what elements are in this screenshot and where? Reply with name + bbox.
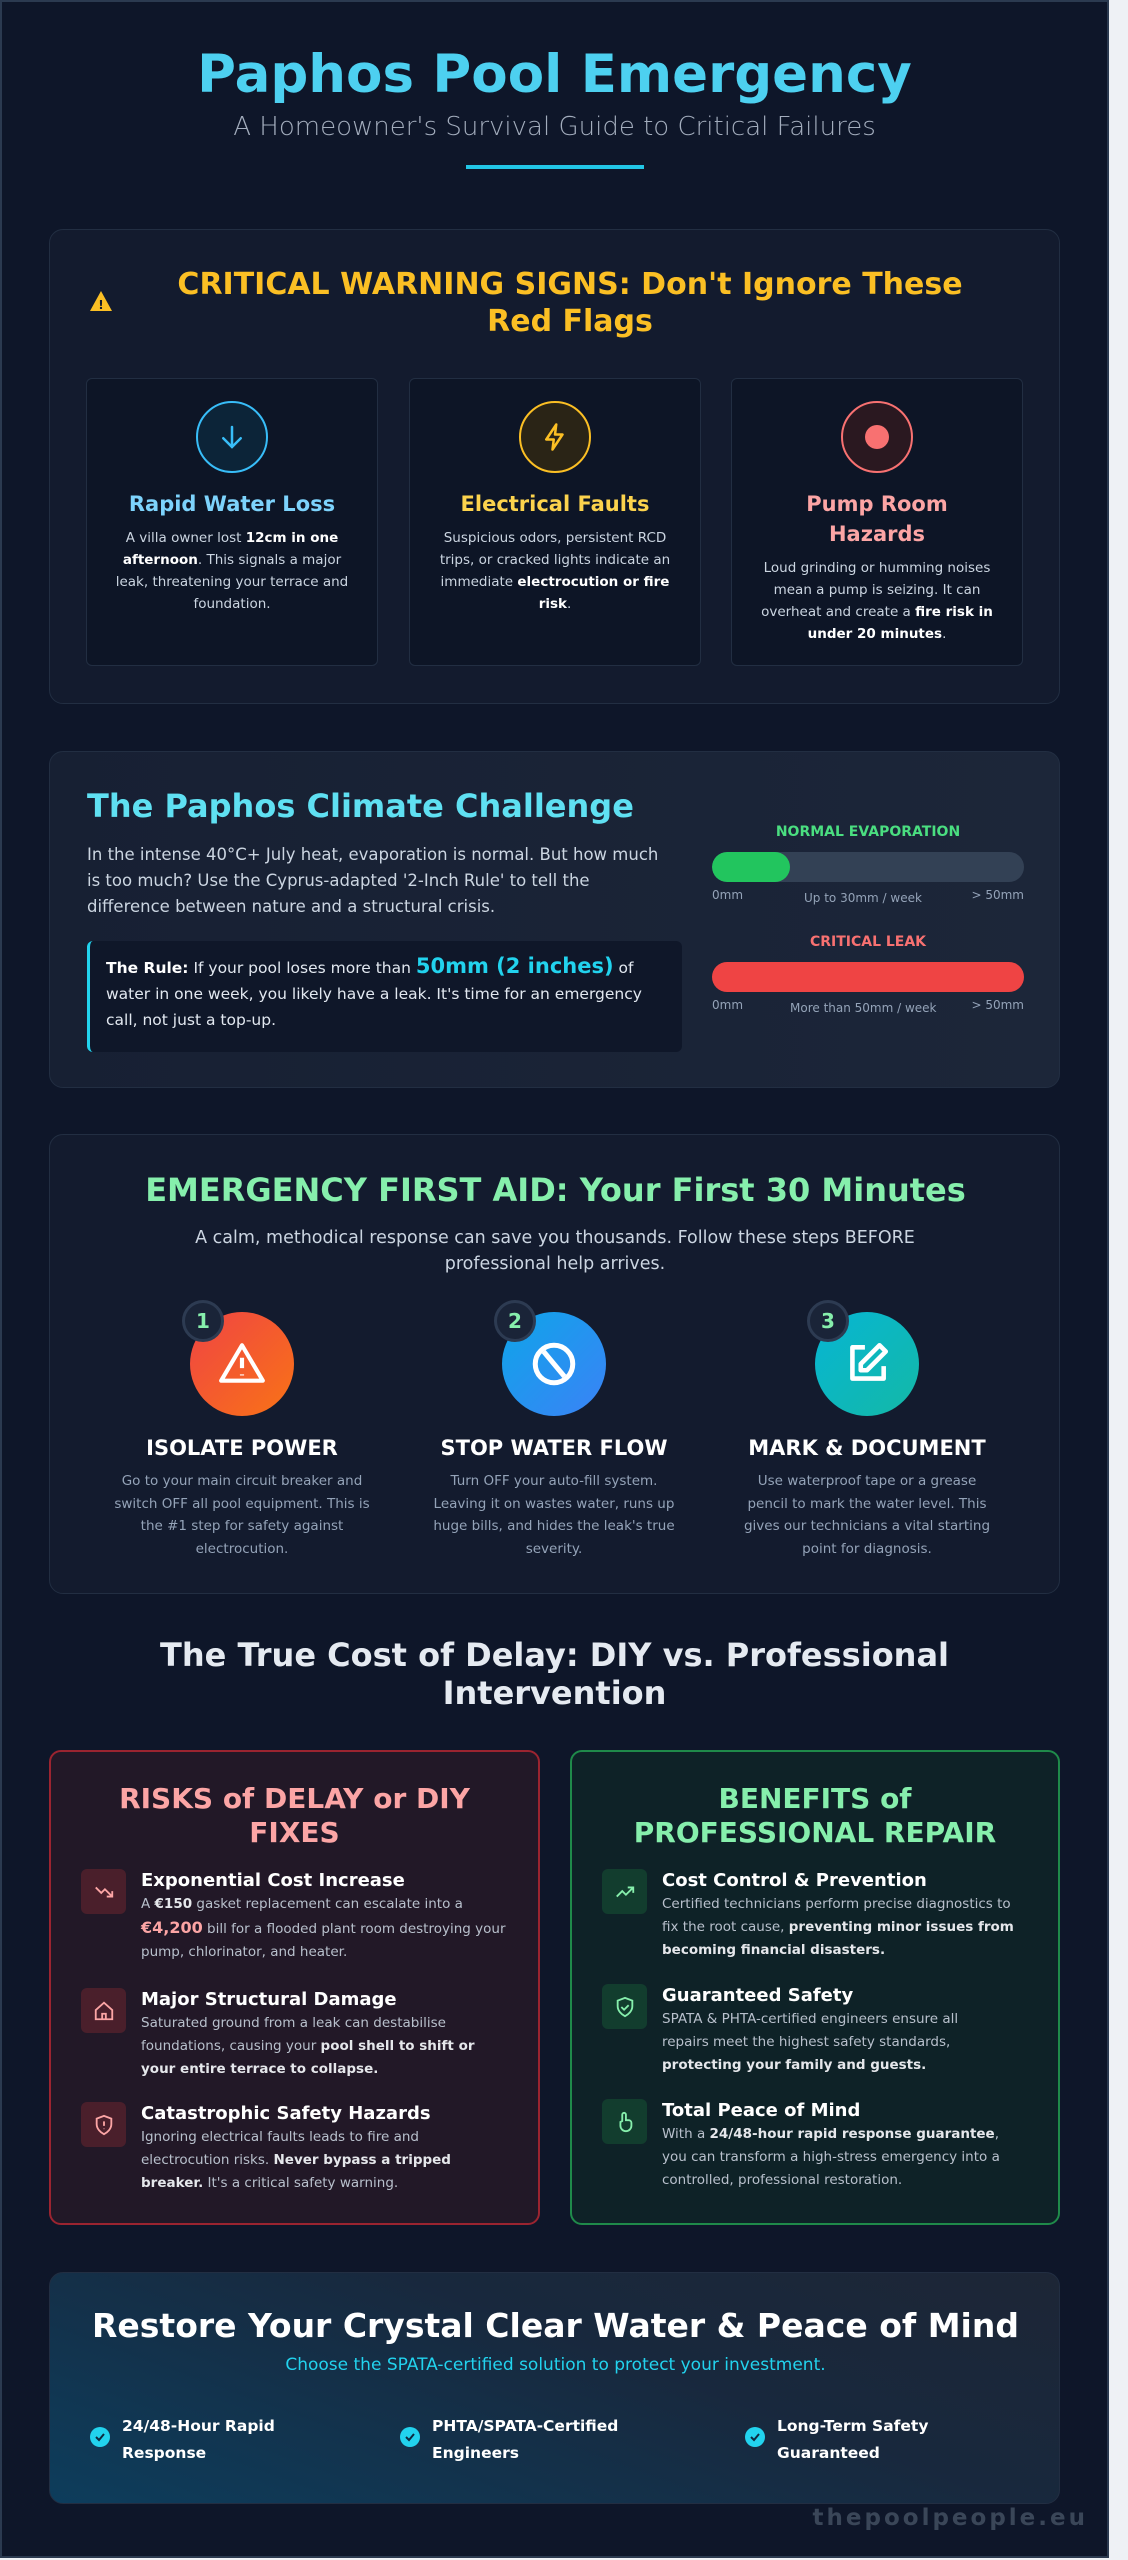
risk item: safety: Ignoring electrical faults leads to fire and electrocution risks. Never bypass a tripped breaker. It's a critical safety warning.	[141, 2129, 451, 2191]
subtitle: A Homeowner's Survival Guide to Critical Failures	[233, 112, 876, 142]
chart: normal evaporation: Up to 30mm / week	[804, 891, 922, 905]
benefits heading	[634, 1782, 996, 1849]
check: certified: Engineers	[432, 2444, 519, 2462]
title underline	[466, 165, 644, 169]
risk item: safety	[81, 2102, 451, 2191]
check: long-term: Guaranteed	[777, 2444, 880, 2462]
chart: normal evaporation: NORMAL EVAPORATION	[776, 824, 960, 840]
climate heading: The Paphos Climate Challenge	[87, 787, 634, 825]
risk item: cost: Exponential Cost Increase	[141, 1870, 405, 1891]
check: rapid response: Response	[122, 2444, 206, 2462]
benefit item: safety: Guaranteed Safety	[662, 1985, 853, 2006]
panel: warning signs	[49, 229, 1060, 704]
card: pump room hazards	[731, 378, 1023, 666]
benefit item: safety	[602, 1984, 958, 2073]
step 1	[114, 1300, 370, 1556]
footer brand: thepoolpeople.eu	[813, 2505, 1088, 2531]
check: certified: PHTA/SPATA-Certified	[432, 2417, 618, 2435]
benefit item: cost control: Cost Control & Prevention	[662, 1870, 927, 1891]
step 2	[433, 1300, 675, 1556]
benefits heading: BENEFITS of	[718, 1782, 912, 1815]
card: pump room hazards: Loud grinding or humming noises mean a pump is seizing. It can overheat and create a fire risk in under 20 minutes.	[761, 560, 993, 642]
chart: normal evaporation: > 50mm	[971, 888, 1024, 902]
step 1: Go to your main circuit breaker and switch OFF all pool equipment. This is the #1 step for safety against electrocution.	[114, 1473, 370, 1556]
step 2: STOP WATER FLOW	[440, 1436, 668, 1460]
benefit item: cost control	[602, 1869, 1014, 1958]
card: rapid water loss: Rapid Water Loss	[129, 492, 335, 516]
first aid heading: EMERGENCY FIRST AID: Your First 30 Minutes	[145, 1171, 966, 1209]
panel: climate challenge	[49, 751, 1060, 1088]
callout: the rule	[87, 941, 682, 1052]
warning heading: CRITICAL WARNING SIGNS: Don't Ignore These Red Flags	[177, 267, 963, 339]
risk item: safety: Catastrophic Safety Hazards	[141, 2103, 431, 2124]
icon: warning triangle: !	[98, 298, 104, 312]
step 3: Use waterproof tape or a grease pencil to mark the water level. This gives our technicians a vital starting point for diagnosis.	[744, 1473, 990, 1556]
climate paragraph: In the intense 40°C+ July heat, evaporation is normal. But how much is too much? Use the Cyprus-adapted '2-Inch Rule' to tell the difference between nature and a structural crisis.	[87, 845, 658, 916]
icon: pump dot	[841, 401, 913, 473]
icon: warning triangle	[90, 291, 112, 312]
chart: critical leak: 0mm	[712, 998, 743, 1012]
card: electrical faults	[409, 378, 701, 666]
step 3: 3	[821, 1309, 835, 1333]
check: long-term	[745, 2417, 928, 2462]
step 3	[744, 1300, 990, 1556]
check: certified	[400, 2417, 618, 2462]
check: rapid response: 24/48-Hour Rapid	[122, 2417, 275, 2435]
benefits heading: PROFESSIONAL REPAIR	[634, 1816, 996, 1849]
step 2: Turn OFF your auto-fill system. Leaving it on wastes water, runs up huge bills, and hides the leak's true severity.	[433, 1473, 675, 1556]
panel: benefits	[570, 1750, 1060, 2225]
card: pump room hazards: Hazards	[829, 522, 925, 546]
panel: call to action	[49, 2272, 1060, 2504]
callout: the rule: The Rule: If your pool loses more than 50mm (2 inches) of water in one week, you likely have a leak. It's time for an emergency call, not just a top-up.	[106, 954, 642, 1029]
risk item: structural: Saturated ground from a leak can destabilise foundations, causing your pool shell to shift or your entire terrace to collapse.	[141, 2015, 475, 2077]
benefit item: peace of mind: Total Peace of Mind	[662, 2100, 860, 2121]
step 3: MARK & DOCUMENT	[748, 1436, 986, 1460]
card: rapid water loss: A villa owner lost 12cm in one afternoon. This signals a major leak, threatening your terrace and foundation.	[116, 530, 348, 612]
risks heading: FIXES	[249, 1816, 340, 1849]
step 2: 2	[508, 1309, 522, 1333]
cost heading	[160, 1636, 949, 1712]
risk item: structural	[81, 1988, 475, 2077]
benefit item: safety: SPATA & PHTA-certified engineers ensure all repairs meet the highest safety standards, protecting your family and guests.	[662, 2011, 958, 2073]
chart: critical leak: > 50mm	[971, 998, 1024, 1012]
title: Paphos Pool Emergency	[197, 44, 912, 105]
cta heading: Restore Your Crystal Clear Water & Peace of Mind	[92, 2306, 1019, 2345]
benefit item: peace of mind	[602, 2099, 1000, 2188]
cta subtitle: Choose the SPATA-certified solution to protect your investment.	[285, 2355, 826, 2375]
first aid intro: A calm, methodical response can save you thousands. Follow these steps BEFORE professional help arrives.	[195, 1228, 915, 1274]
benefit item: cost control: Certified technicians perform precise diagnostics to fix the root cause, preventing minor issues from becoming financial disasters.	[662, 1896, 1014, 1958]
chart: critical leak	[712, 934, 1024, 1015]
card: electrical faults: Electrical Faults	[461, 492, 649, 516]
card: rapid water loss	[86, 378, 378, 666]
risk item: structural: Major Structural Damage	[141, 1989, 397, 2010]
chart: critical leak: CRITICAL LEAK	[810, 934, 926, 950]
risks heading	[119, 1782, 470, 1849]
check: rapid response	[90, 2417, 275, 2462]
risk item: cost	[81, 1869, 506, 1960]
panel: first aid	[49, 1134, 1060, 1594]
card: pump room hazards: Pump Room	[806, 492, 948, 516]
panel: risks	[49, 1750, 540, 2225]
cost heading: Intervention	[443, 1674, 666, 1712]
step 1: ISOLATE POWER	[146, 1436, 338, 1460]
chart: normal evaporation: 0mm	[712, 888, 743, 902]
icon: lightning	[519, 401, 591, 473]
chart: normal evaporation	[712, 824, 1024, 905]
benefit item: peace of mind: With a 24/48-hour rapid response guarantee, you can transform a high-stress emergency into a controlled, professional restoration.	[662, 2126, 1000, 2188]
risk item: cost: A €150 gasket replacement can escalate into a €4,200 bill for a flooded plant room destroying your pump, chlorinator, and heater.	[141, 1896, 506, 1960]
step 1: 1	[196, 1309, 210, 1333]
cost heading: The True Cost of Delay: DIY vs. Professional	[160, 1636, 949, 1674]
chart: critical leak: More than 50mm / week	[790, 1001, 936, 1015]
check: long-term: Long-Term Safety	[777, 2417, 928, 2435]
risks heading: RISKS of DELAY or DIY	[119, 1782, 470, 1815]
icon: down arrow	[196, 401, 268, 473]
card: electrical faults: Suspicious odors, persistent RCD trips, or cracked lights indicate an immediate electrocution or fire risk.	[440, 530, 670, 612]
